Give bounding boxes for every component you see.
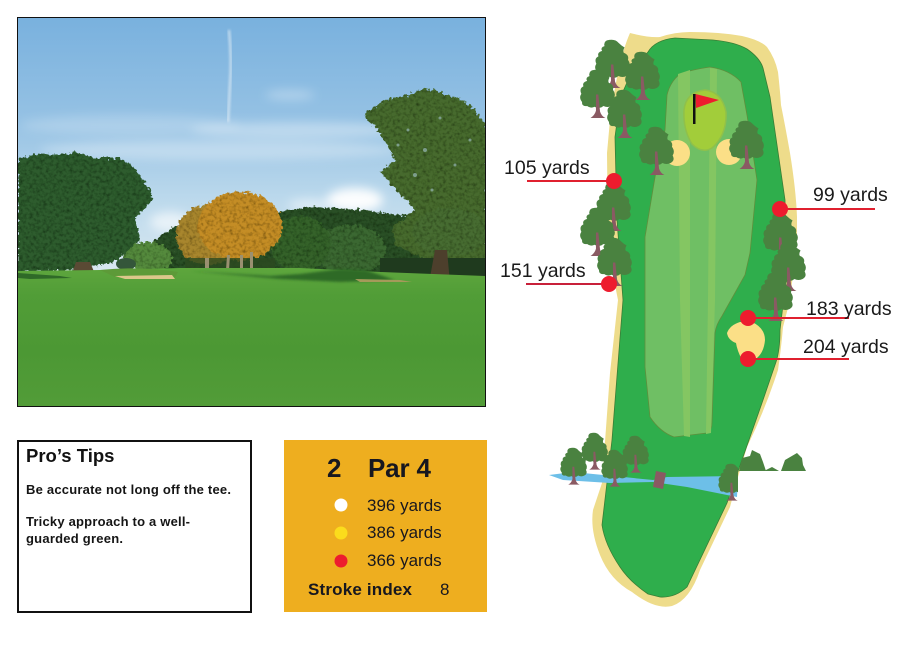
fairway stripes bbox=[678, 68, 717, 437]
red tee: 366 yards bbox=[367, 551, 442, 570]
trees by green bbox=[639, 127, 674, 175]
marker: 99 yards bbox=[772, 184, 888, 217]
panel: pro's tips bbox=[18, 441, 251, 612]
marker: 105 yards: 105 yards bbox=[504, 157, 590, 179]
tips body text: guarded green. bbox=[26, 531, 123, 546]
red tee bbox=[334, 551, 442, 570]
photo orange tree bbox=[175, 204, 227, 266]
photo left oak bbox=[18, 152, 153, 272]
photo sky bbox=[18, 18, 485, 278]
yellow tee bbox=[334, 523, 442, 542]
marker: 204 yards bbox=[740, 336, 889, 367]
green bbox=[684, 90, 726, 150]
tips heading: Pro’s Tips bbox=[26, 445, 114, 466]
marker: 105 yards bbox=[504, 157, 622, 189]
fairway bbox=[645, 67, 757, 437]
marker: 183 yards: 183 yards bbox=[806, 298, 892, 320]
bunkers bbox=[664, 139, 765, 360]
trees along water bbox=[560, 448, 587, 485]
icon: flag bbox=[693, 94, 719, 124]
trees right side bbox=[763, 213, 798, 261]
marker: 151 yards: 151 yards bbox=[500, 260, 586, 282]
hole map bbox=[500, 32, 892, 607]
cropped tree tops bbox=[739, 450, 806, 471]
stroke index: Stroke index bbox=[308, 580, 413, 599]
fairway surround bbox=[602, 38, 786, 597]
photo forest bbox=[154, 205, 423, 272]
par: Par 4 bbox=[368, 453, 432, 483]
tips body text: Be accurate not long off the tee. bbox=[26, 482, 231, 497]
marker: 183 yards bbox=[740, 298, 892, 326]
marker: 151 yards bbox=[500, 260, 617, 292]
photo grass bbox=[18, 268, 486, 406]
hole number: 2 bbox=[327, 453, 341, 483]
bridge bbox=[653, 471, 666, 489]
trees upper left bbox=[595, 40, 630, 88]
white tee: 396 yards bbox=[367, 496, 442, 515]
tips body text: Tricky approach to a well- bbox=[26, 514, 190, 529]
tips body text bbox=[26, 482, 231, 546]
cropped tree at water edge bbox=[718, 464, 738, 501]
photo right oak bbox=[363, 88, 486, 262]
marker: 204 yards: 204 yards bbox=[803, 336, 889, 358]
yellow tee: 386 yards bbox=[367, 523, 442, 542]
white tee bbox=[334, 496, 442, 515]
marker: 99 yards: 99 yards bbox=[813, 184, 888, 206]
sand outline bbox=[592, 32, 797, 607]
panel: hole information bbox=[284, 440, 487, 612]
stroke index: 8 bbox=[440, 580, 449, 599]
photo: golf hole view bbox=[17, 17, 488, 407]
trees left side bbox=[596, 183, 631, 231]
water bbox=[549, 472, 738, 497]
